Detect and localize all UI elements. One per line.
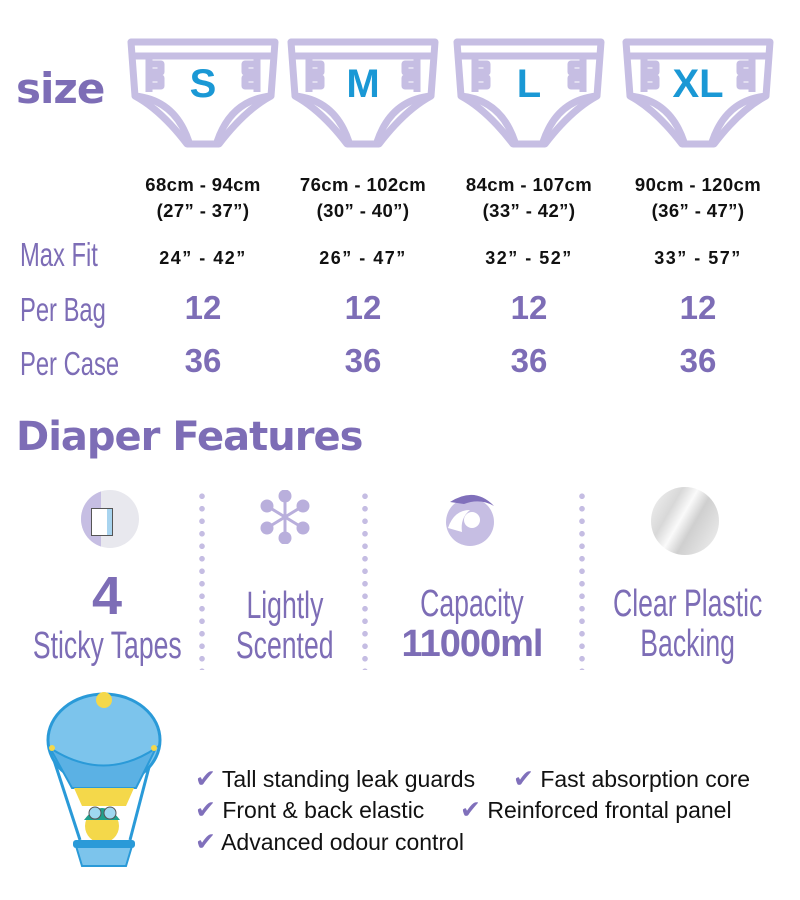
feature: clear plastic backing: Clear Plastic <box>613 583 763 625</box>
checklist: ✔ Tall standing leak guards <box>195 765 475 793</box>
feature: lightly scented: Lightly <box>247 585 323 627</box>
checklist: ✔ Fast absorption core <box>513 765 750 793</box>
row: max fit: Max Fit <box>20 236 98 273</box>
title: size: size <box>16 64 104 113</box>
row: per case: 36 <box>345 342 381 379</box>
diaper icons row: M <box>346 62 380 106</box>
size measurements: 76cm - 102cm <box>300 174 426 195</box>
feature: capacity <box>402 583 542 665</box>
checklist <box>195 765 750 856</box>
row: max fit: 33” - 57” <box>654 248 742 268</box>
icon: scent <box>260 490 310 544</box>
feature: clear plastic backing: Backing <box>641 623 735 665</box>
size measurements: 90cm - 120cm <box>635 174 761 195</box>
checklist: ✔ Advanced odour control <box>195 828 464 856</box>
diaper icons row: L <box>517 62 541 106</box>
checklist: ✔ Front & back elastic <box>195 796 424 824</box>
diaper icons row: XL <box>672 62 724 106</box>
size measurements: 84cm - 107cm <box>466 174 592 195</box>
feature: lightly scented <box>236 585 334 667</box>
size measurements: (36” - 47”) <box>652 200 744 221</box>
row: per case: 36 <box>511 342 547 379</box>
feature: clear plastic backing <box>613 583 763 665</box>
size measurements: (30” - 40”) <box>317 200 409 221</box>
row: per bag: 12 <box>185 289 221 326</box>
checklist: ✔ Reinforced frontal panel <box>460 796 732 824</box>
feature: capacity: Capacity <box>420 583 524 625</box>
row: per bag: 12 <box>680 289 716 326</box>
row: per bag <box>20 289 716 328</box>
feature: 4 sticky tapes: Sticky Tapes <box>33 625 181 667</box>
icon: swirl <box>446 494 494 546</box>
row: max fit <box>20 236 742 273</box>
row: per bag: 12 <box>345 289 381 326</box>
row: per bag: Per Bag <box>20 291 106 328</box>
row: per case: 36 <box>680 342 716 379</box>
feature: capacity: 11000ml <box>402 623 542 665</box>
illustration: hot air balloon <box>46 692 162 867</box>
icon: sticky tape <box>81 490 139 548</box>
size measurements: (27” - 37”) <box>157 200 249 221</box>
size measurements <box>145 174 761 221</box>
feature: lightly scented: Scented <box>236 625 334 667</box>
feature: 4 sticky tapes: 4 <box>92 566 122 626</box>
feature: 4 sticky tapes <box>33 566 181 667</box>
row: max fit: 26” - 47” <box>319 248 407 268</box>
row: max fit: 24” - 42” <box>159 248 247 268</box>
icon: clear plastic <box>651 487 719 555</box>
row: per case: 36 <box>185 342 221 379</box>
size measurements: (33” - 42”) <box>483 200 575 221</box>
heading: diaper features: Diaper Features <box>16 414 362 460</box>
row: per case <box>20 342 716 382</box>
size measurements: 68cm - 94cm <box>145 174 261 195</box>
row: per bag: 12 <box>511 289 547 326</box>
diaper icons row <box>128 38 774 148</box>
size letters: S <box>190 62 216 106</box>
row: max fit: 32” - 52” <box>485 248 573 268</box>
row: per case: Per Case <box>20 345 119 382</box>
